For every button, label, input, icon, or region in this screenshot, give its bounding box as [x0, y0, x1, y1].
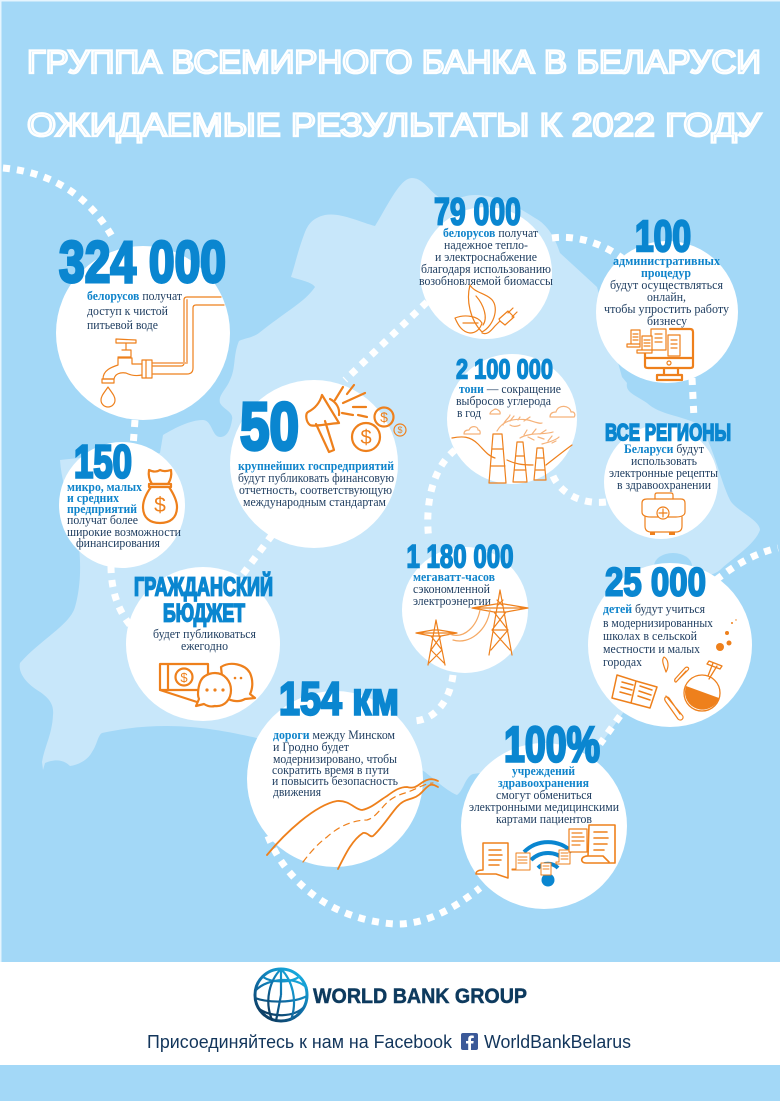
text: energy savings: мегаватт-часов [413, 570, 495, 584]
text: small business: микро, малых [67, 480, 143, 494]
number: 324 000: 324 000 [59, 230, 226, 295]
text: healthcare: электронными медицинскими [469, 800, 619, 814]
text: schools: местности и малых [603, 642, 701, 656]
text: biomass energy: и электроснабжение [435, 250, 537, 264]
text: clean water [87, 289, 182, 332]
text: energy savings: сэкономленной [413, 582, 490, 596]
text: road: и повысить безопасность [272, 774, 398, 788]
text: energy savings [413, 570, 495, 608]
text: small business: получат более [67, 513, 138, 527]
text: road [272, 728, 398, 799]
text: state enterprises: отчетность, соответствующую [239, 483, 392, 497]
text: clean water: питьевой воде [87, 318, 158, 332]
text: schools: городах [603, 655, 643, 669]
text: admin procedures: бизнесу [647, 314, 688, 328]
text: healthcare: картами пациентов [496, 812, 592, 826]
text: carbon emissions: тони — сокращение [459, 382, 561, 396]
text: small business [67, 480, 181, 550]
heading: citizen budget: БЮДЖЕТ [163, 600, 245, 628]
number: 25 000: 25 000 [605, 560, 706, 604]
text: healthcare: учреждений [512, 764, 575, 778]
text: biomass energy: белорусов получат [443, 226, 538, 240]
text: road: движения [273, 785, 321, 799]
text: schools: школах в сельской [603, 629, 697, 643]
text: healthcare: смогут обмениться [496, 788, 592, 802]
panel: road [247, 672, 438, 869]
text: road: и Гродно будет [273, 740, 350, 754]
panel: clean water [56, 230, 230, 420]
icon: megaphone and coins [306, 385, 406, 452]
text: admin procedures [604, 254, 730, 328]
icon: power pylons [416, 590, 528, 665]
text: small business: и средних [67, 491, 120, 505]
number: 150: 150 [74, 436, 132, 488]
text: state enterprises [238, 459, 394, 509]
icon: megaphone and coins: $ [397, 425, 403, 435]
text: state enterprises: крупнейших госпредприятий [238, 459, 394, 473]
panel: healthcare [461, 716, 627, 909]
text: citizen budget: ежегодно [181, 639, 228, 653]
icon: facebook [461, 1033, 478, 1050]
icon: money bag: $ [154, 494, 166, 517]
text: e-prescriptions [609, 442, 719, 492]
panel: carbon emissions [447, 354, 577, 484]
text: e-prescriptions: использовать [631, 454, 697, 468]
heading: citizen budget [134, 572, 273, 628]
icon: banknote and speech bubbles: $ [180, 670, 188, 685]
text: admin procedures: будут осуществляться [610, 278, 723, 292]
logo: globe [255, 969, 307, 1021]
panel: small business [59, 436, 185, 568]
text: carbon emissions: в год [457, 406, 482, 420]
text: admin procedures: чтобы упростить работу [604, 302, 730, 316]
text: biomass energy [419, 226, 554, 288]
text: e-prescriptions: Беларуси будут [624, 442, 705, 456]
text: road: сократить время в пути [272, 763, 389, 777]
facebook invitation: Присоединяйтесь к нам на Facebook [147, 1032, 453, 1052]
icon: medical kit [642, 493, 685, 535]
text: schools: в модернизированных [603, 616, 714, 630]
number: 50: 50 [240, 390, 299, 464]
facebook account: WorldBankBelarus [484, 1032, 631, 1052]
text: clean water: белорусов получат [87, 289, 182, 303]
icon: water tap and pipe [101, 297, 224, 407]
number: 2 100 000: 2 100 000 [456, 354, 553, 384]
map of Belarus [20, 178, 760, 795]
panel: biomass energy [419, 192, 554, 339]
heading: all regions: ВСЕ РЕГИОНЫ [605, 420, 731, 446]
text: admin procedures: процедур [641, 266, 691, 280]
text: road: дороги между Минском [273, 728, 395, 742]
text: small business: широкие возможности [67, 525, 181, 539]
text: road: модернизировано, чтобы [273, 752, 398, 766]
icon: leaves and plug [455, 285, 517, 334]
text: healthcare: здравоохранения [498, 776, 589, 790]
text: biomass energy: возобновляемой биомассы [419, 274, 554, 288]
footer band [0, 962, 780, 1065]
dotted connector path [3, 168, 778, 924]
text: citizen budget: будет публиковаться [153, 627, 256, 641]
number: 100: 100 [635, 212, 691, 261]
number: 1 180 000: 1 180 000 [406, 538, 514, 574]
icon: megaphone and coins: $ [380, 409, 388, 425]
text: schools: детей будут учиться [603, 602, 705, 616]
heading: citizen budget: ГРАЖДАНСКИЙ [134, 572, 273, 602]
number: 79 000: 79 000 [434, 192, 521, 234]
panel: citizen budget [126, 567, 280, 721]
text: biomass energy: надежное тепло- [444, 238, 528, 252]
text: admin procedures: онлайн, [647, 290, 686, 304]
title [27, 44, 762, 143]
text: e-prescriptions: электронные рецепты [609, 466, 719, 480]
text: state enterprises: международным стандартам [243, 495, 386, 509]
panel: state enterprises [230, 380, 406, 548]
panel: admin procedures [596, 212, 738, 383]
text: state enterprises: будут публиковать финансовую [238, 471, 394, 485]
text: small business: финансирования [76, 536, 160, 550]
title: ОЖИДАЕМЫЕ РЕЗУЛЬТАТЫ К 2022 ГОДУ [27, 107, 762, 143]
text: carbon emissions: выбросов углерода [456, 394, 551, 408]
panel: schools [588, 560, 752, 727]
text: clean water: доступ к чистой [87, 304, 168, 318]
icon: winding road [267, 779, 438, 869]
panel: energy savings [402, 538, 528, 673]
text: energy savings: электроэнергии [413, 594, 491, 608]
text: carbon emissions [456, 382, 561, 420]
logo text: WORLD BANK GROUP [313, 985, 527, 1008]
text: biomass energy: благодаря использованию [421, 262, 551, 276]
icon: banknote and speech bubbles [160, 664, 255, 706]
number: 100%: 100% [504, 716, 600, 772]
icon: book, paperclips and flask [612, 619, 737, 720]
text: admin procedures: административных [613, 254, 721, 268]
icon: chimneys, hills and clouds [452, 406, 575, 483]
panel: all regions [604, 420, 731, 539]
icon: wifi and documents [476, 825, 615, 886]
text: e-prescriptions: в здравоохранении [617, 478, 711, 492]
text: citizen budget [153, 627, 256, 653]
text: healthcare [469, 764, 619, 826]
title: ГРУППА ВСЕМИРНОГО БАНКА В БЕЛАРУСИ [27, 44, 761, 80]
text: schools [603, 602, 714, 669]
icon: computer with documents [627, 329, 693, 380]
icon: megaphone and coins: $ [360, 427, 372, 449]
text: small business: предприятий [67, 502, 137, 516]
number: 154 km: 154 км [279, 672, 399, 724]
